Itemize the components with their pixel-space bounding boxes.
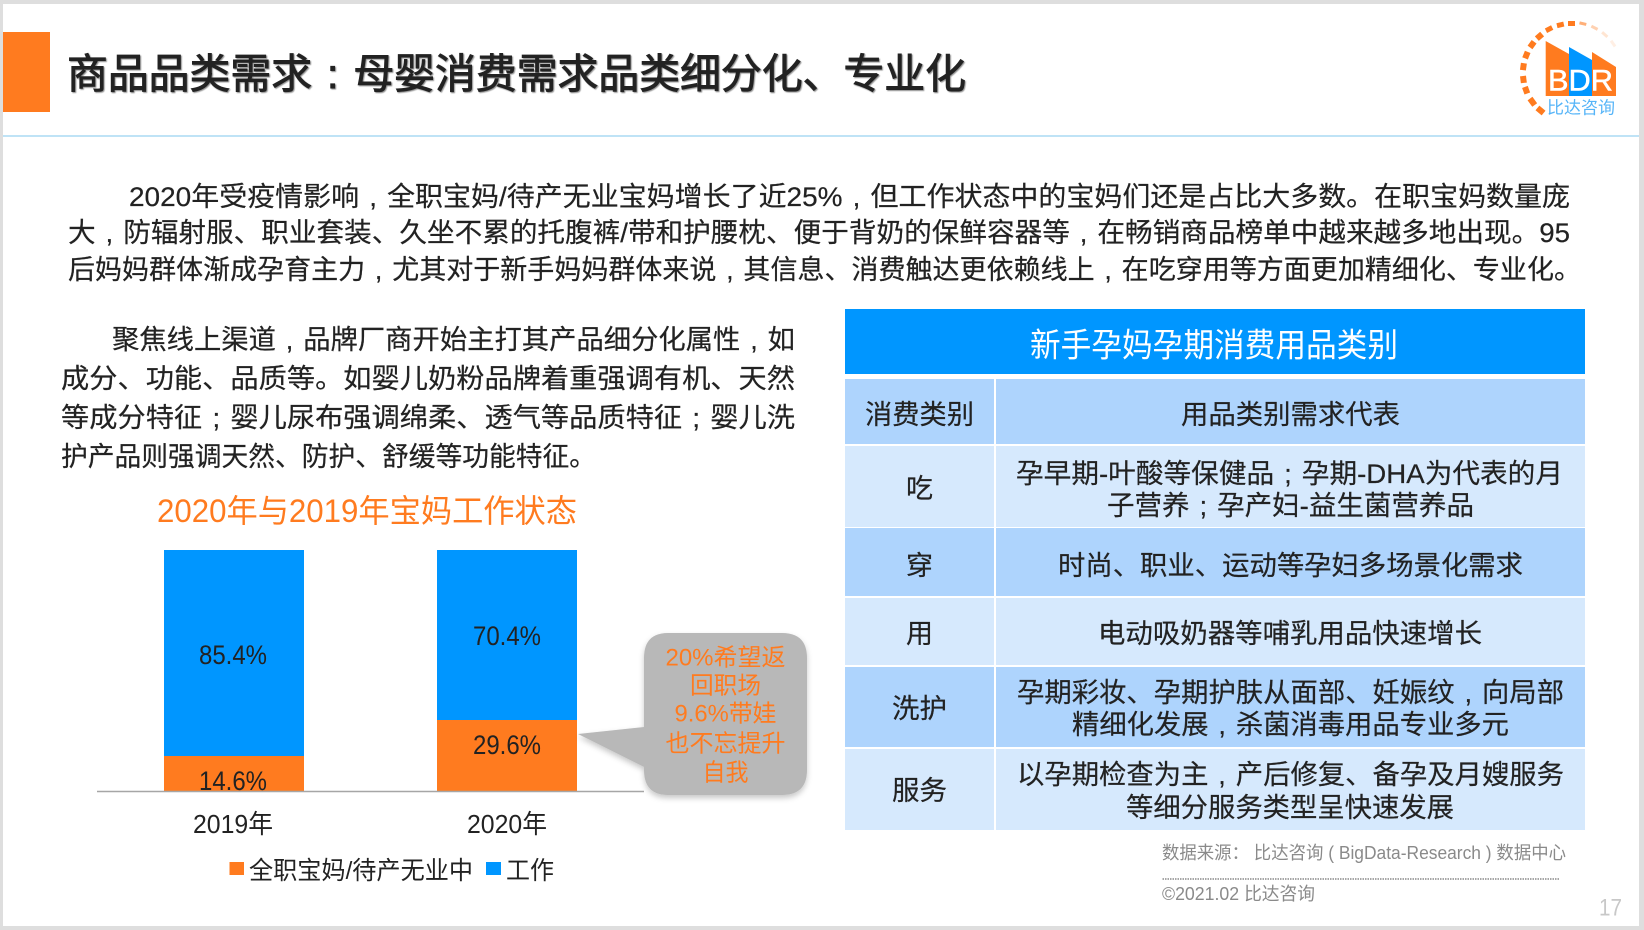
table title: 新手孕妈孕期消费用品类别 [1030, 326, 1398, 364]
bar: 2019: 2019年 [193, 809, 273, 839]
row: use [845, 598, 1585, 665]
table title [845, 309, 1585, 374]
row: services: 以孕期检查为主 , 产后修复、备孕及月嫂服务 [1017, 756, 1564, 794]
source note [1162, 843, 1566, 904]
row: services: 等细分服务类型呈快速发展 [1126, 793, 1454, 823]
row: eat: 孕早期-叶酸等保健品 ; 孕期-DHA为代表的月 [1016, 454, 1563, 494]
row: eat: 子营养 ; 孕产妇-益生菌营养品 [1107, 486, 1474, 526]
left paragraph: 成分、功能、品质等。如婴儿奶粉品牌着重强调有机、天然 [61, 364, 795, 394]
source note: 数据来源： 比达咨询 ( BigData-Research ) 数据中心 [1162, 843, 1566, 863]
row: wear [845, 528, 1585, 596]
bar: 2020 [437, 550, 577, 839]
row: wear: 时尚、职业、运动等孕妇多场景化需求 [1058, 551, 1523, 581]
row: use: 电动吸奶器等哺乳用品快速增长 [1098, 619, 1482, 649]
source note: ©2021.02 比达咨询 [1162, 884, 1315, 904]
row: eat: 吃 [906, 474, 933, 504]
row: care: 精细化发展 , 杀菌消毒用品专业多元 [1072, 706, 1509, 744]
intro paragraph: 后妈妈群体渐成孕育主力 , 尤其对于新手妈妈群体来说 , 其信息、消费触达更依赖线上 , 在吃穿用等方面更加精细化、专业化。 [68, 250, 1581, 290]
left paragraph: 聚焦线上渠道 , 品牌厂商开始主打其产品细分化属性 , 如 [112, 320, 795, 360]
intro paragraph [68, 178, 1581, 290]
logo: BDR [1520, 21, 1616, 118]
callout: 也不忘提升 [666, 730, 786, 758]
row: wear: 穿 [906, 551, 933, 581]
callout [578, 633, 807, 795]
header accent block [3, 32, 50, 112]
left paragraph: 护产品则强调天然、防护、舒缓等功能特征。 [61, 442, 596, 472]
header row: 用品类别需求代表 [1181, 400, 1400, 430]
callout: 回职场 [690, 672, 761, 700]
title: 商品品类需求 : 母婴消费需求品类细分化、专业化 [67, 44, 966, 104]
bar: 2020: 70.4% [473, 621, 541, 651]
chart title: 2020年与2019年宝妈工作状态 [157, 493, 577, 529]
callout: 9.6%带娃 [674, 700, 776, 728]
row: services [845, 749, 1585, 830]
bar: 2020: 2020年 [467, 809, 547, 839]
logo: BDR: 比达咨询 [1547, 98, 1615, 118]
chart legend: 全职宝妈/待产无业中 [249, 857, 473, 885]
page number: 17 [1599, 894, 1622, 922]
table: maternity consumption categories [845, 309, 1585, 830]
bar: 2019: 14.6% [199, 766, 267, 796]
callout: 20%希望返 [666, 644, 786, 672]
left paragraph: 等成分特征 ; 婴儿尿布强调绵柔、透气等品质特征 ; 婴儿洗 [61, 398, 795, 438]
row: care: 洗护 [892, 694, 947, 724]
left paragraph [61, 320, 795, 472]
chart legend: 工作 [506, 857, 554, 885]
row: care [845, 667, 1585, 747]
row: services: 服务 [892, 776, 947, 806]
header row: 消费类别 [865, 400, 974, 430]
stacked bar chart [97, 550, 644, 839]
bar: 2020: 29.6% [473, 730, 541, 760]
row: care: 孕期彩妆、孕期护肤从面部、妊娠纹 , 向局部 [1017, 674, 1564, 712]
row: use: 用 [906, 619, 933, 649]
header row [845, 379, 1585, 444]
callout: 自我 [702, 760, 748, 786]
intro paragraph: 大 , 防辐射服、职业套装、久坐不累的托腹裤/带和护腰枕、便于背奶的保鲜容器等 , 在畅销商品榜单中越来越多地出现。95 [68, 214, 1570, 252]
intro paragraph: 2020年受疫情影响 , 全职宝妈/待产无业宝妈增长了近25% , 但工作状态中的宝妈们还是占比大多数。在职宝妈数量庞 [129, 178, 1570, 216]
logo: BDR: BDR [1548, 64, 1613, 98]
bar: 2019 [164, 550, 304, 839]
row: eat [845, 446, 1585, 527]
bar: 2019: 85.4% [199, 640, 267, 670]
